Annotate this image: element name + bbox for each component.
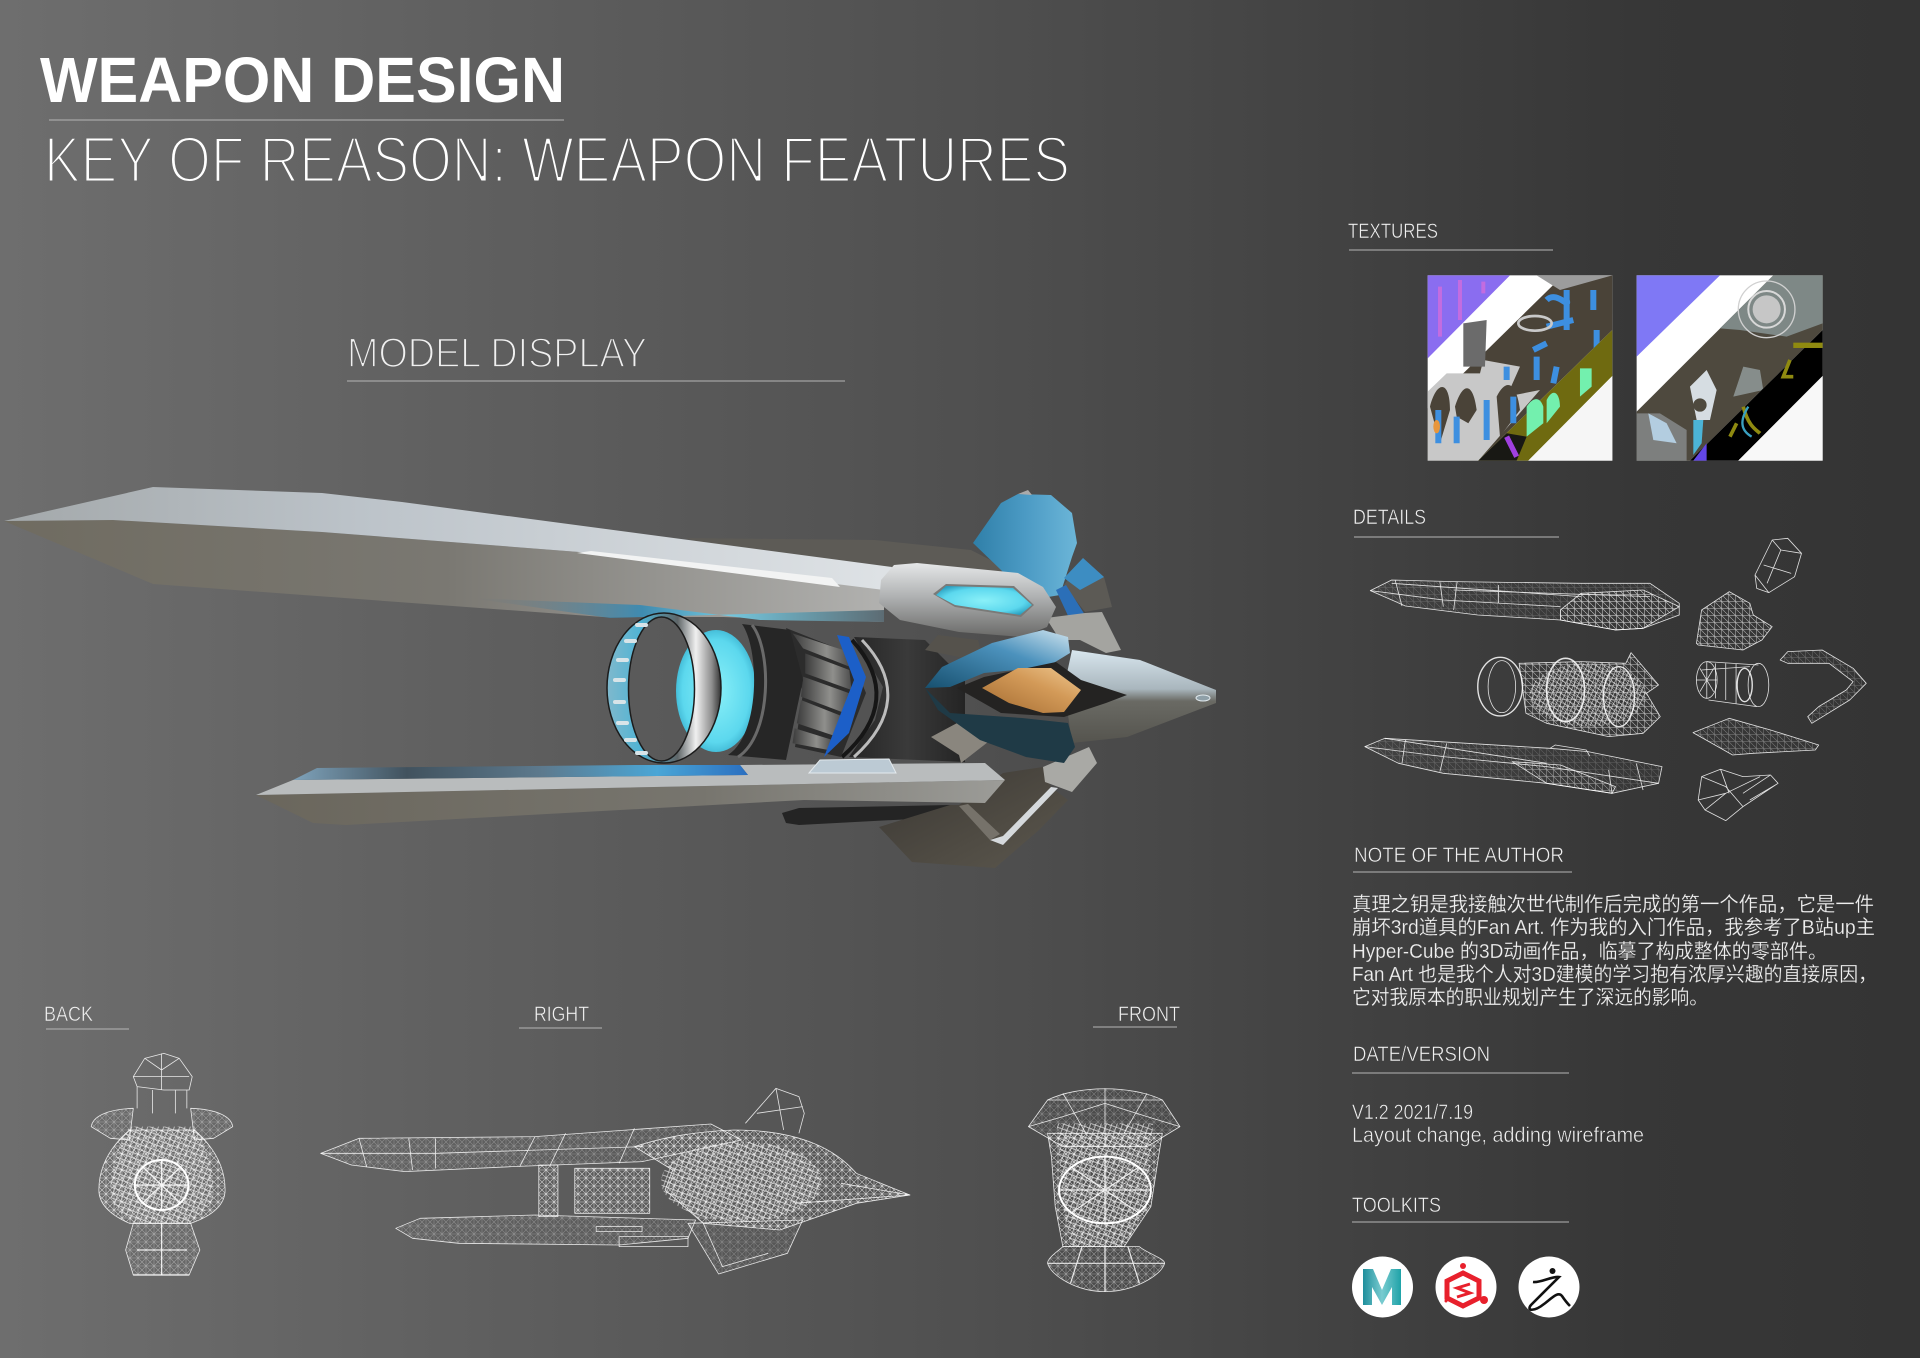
weapon render — [4, 487, 1216, 868]
dark body behind upper blade — [685, 538, 1050, 600]
label: front: FRONT — [1118, 1003, 1180, 1026]
side fin — [1046, 558, 1121, 653]
version text — [1352, 1101, 1644, 1147]
subtitle: KEY OF REASON: WEAPON FEATURES — [44, 123, 1070, 196]
texture map 2 — [1637, 275, 1823, 461]
small fins — [925, 635, 988, 763]
upper blade head — [879, 563, 1056, 637]
wireframe: back view — [91, 1053, 233, 1275]
rear dark cylinder — [842, 637, 965, 762]
gear fins — [786, 628, 866, 757]
author note text: Fan Art 也是我个人对3D建模的学习抱有浓厚兴趣的直接原因， — [1352, 963, 1877, 986]
grip — [879, 747, 1097, 868]
dark teal wing — [925, 688, 1075, 763]
gold gem — [982, 668, 1081, 713]
ring — [607, 613, 721, 763]
texture map 1 — [1428, 275, 1612, 461]
cone part — [1693, 718, 1819, 755]
author note text: 真理之钥是我接触次世代制作后完成的第一个作品，它是一件 — [1352, 893, 1874, 916]
icon: substance painter — [1436, 1256, 1496, 1318]
arc bracket part — [1780, 650, 1866, 723]
claw part — [1698, 769, 1778, 821]
heading: model display: MODEL DISPLAY — [347, 329, 647, 376]
wireframe: detail parts — [1365, 538, 1866, 821]
cyan lens — [936, 586, 1032, 615]
small panel — [809, 759, 896, 773]
title: WEAPON DESIGN — [40, 44, 565, 116]
lower blade part — [1365, 738, 1662, 793]
heading: details: DETAILS — [1353, 506, 1426, 529]
cylinder part — [1696, 662, 1769, 707]
heading: textures: TEXTURES — [1348, 220, 1438, 243]
cluster part — [1696, 592, 1772, 650]
upper blade part — [1370, 580, 1679, 630]
heading: date/version: DATE/VERSION — [1353, 1043, 1490, 1066]
core part — [1478, 653, 1660, 737]
version text: V1.2 2021/7.19 — [1352, 1101, 1473, 1124]
dark barrel — [728, 624, 803, 760]
upper blade — [4, 487, 892, 622]
dark socket — [957, 662, 1127, 717]
crystal part — [1755, 538, 1801, 593]
icon: blue crystal — [973, 494, 1077, 600]
glowing core disc — [676, 630, 756, 752]
author note text: 崩坏3rd道具的Fan Art. 作为我的入门作品，我参考了B站up主 — [1352, 916, 1875, 939]
lower barrel — [782, 805, 950, 825]
author note text — [1352, 893, 1877, 1009]
icon: zbrush — [1518, 1256, 1580, 1318]
author note text: Hyper-Cube 的3D动画作品，临摹了构成整体的零部件。 — [1352, 940, 1827, 963]
version text: Layout change, adding wireframe — [1352, 1124, 1644, 1147]
icon: maya — [1352, 1256, 1413, 1318]
label: right: RIGHT — [534, 1003, 589, 1026]
heading: toolkits: TOOLKITS — [1352, 1194, 1441, 1217]
author note text: 它对我原本的职业规划产生了深远的影响。 — [1352, 986, 1708, 1009]
label: back: BACK — [44, 1003, 93, 1026]
wireframe: right view — [321, 1088, 910, 1274]
blue hood — [925, 630, 1070, 688]
heading: note of the author: NOTE OF THE AUTHOR — [1354, 844, 1564, 867]
lower blade — [256, 759, 1005, 825]
wireframe: front view — [1028, 1088, 1180, 1292]
tip ring — [1196, 695, 1210, 701]
nose cone — [1064, 650, 1216, 743]
